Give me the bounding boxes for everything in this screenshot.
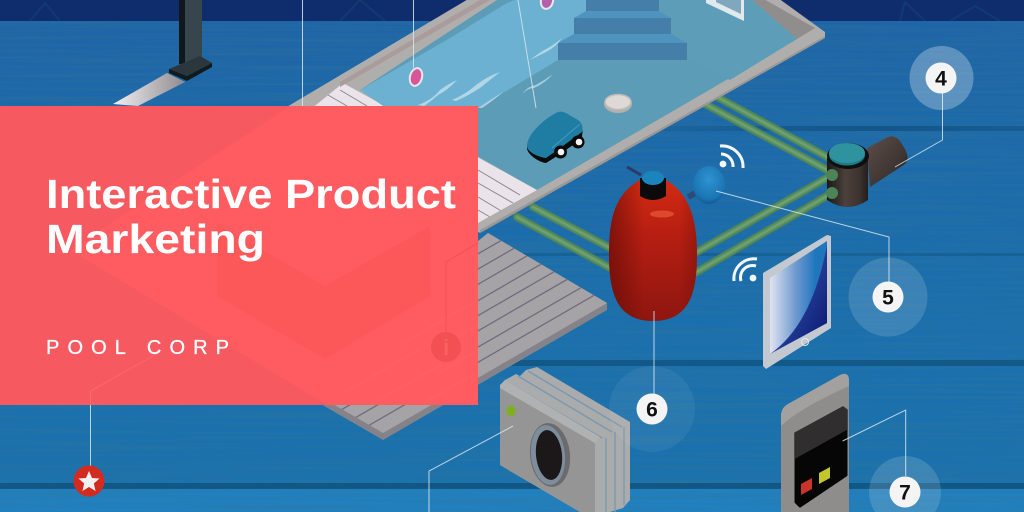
subtitle: POOL CORP: [46, 337, 229, 359]
pool window: [706, 0, 744, 21]
rim shadow edge: [480, 36, 825, 233]
remote control: [781, 374, 849, 512]
star marker: [74, 466, 104, 496]
pool light left: [407, 66, 425, 88]
marker 4: [910, 46, 974, 110]
info icon: i: [443, 335, 449, 360]
marker 6: 6: [646, 398, 658, 422]
back rim: [750, 0, 815, 39]
wifi icon upper: [720, 146, 743, 168]
swimming pool: [285, 0, 825, 233]
pipes: [517, 98, 832, 273]
marker 7: 7: [899, 482, 911, 504]
lamp post: [113, 0, 212, 106]
pool steps: [558, 0, 687, 60]
marker 6: [609, 366, 695, 452]
tablet: [763, 235, 831, 369]
pool light right: [538, 0, 556, 12]
marker 4: 4: [935, 68, 947, 90]
shallow wall: [360, 0, 586, 108]
wifi icon lower: [734, 259, 757, 281]
rim stripe: [340, 0, 490, 87]
pump: [826, 136, 908, 207]
heater unit: [500, 367, 630, 512]
marker 5: [848, 258, 928, 336]
red title panel: [0, 106, 478, 405]
title: Interactive Product: [46, 171, 456, 217]
right wall: [659, 0, 797, 80]
info icon: [431, 243, 478, 362]
title: Marketing: [46, 216, 265, 262]
pool outer rim: [285, 0, 825, 233]
lower grey deck: [322, 233, 607, 440]
drain: [604, 94, 632, 113]
white deck: [300, 83, 537, 223]
hidden callout line: [90, 352, 160, 405]
pool robot cleaner: [527, 112, 584, 163]
marker 5: 5: [882, 286, 894, 310]
water ripples: [418, 38, 562, 108]
wireless valve: [688, 166, 725, 204]
dark water strip at top: [0, 0, 1024, 21]
sand filter tank: [609, 167, 697, 321]
water floor: [360, 0, 797, 190]
marker 7: [869, 456, 941, 512]
